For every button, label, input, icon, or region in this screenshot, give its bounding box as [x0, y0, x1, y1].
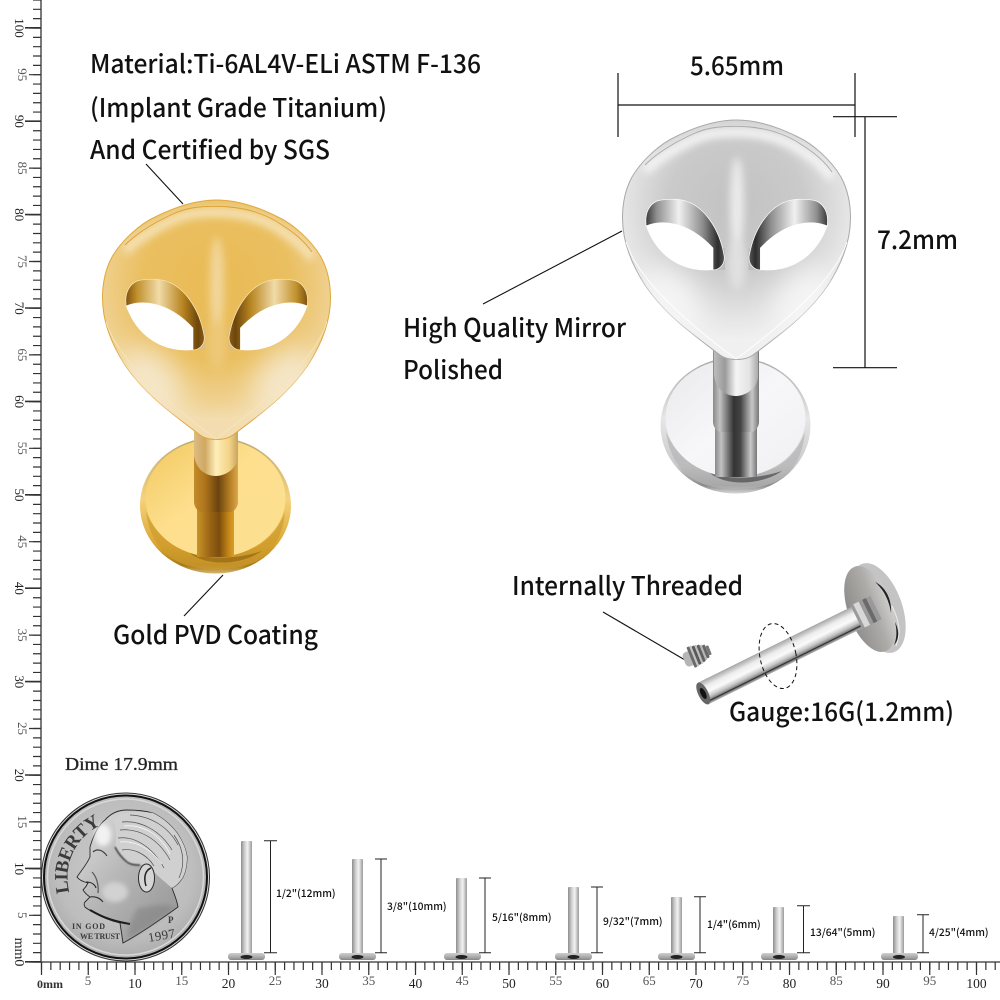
- ruler: vertical axis: mm0: [11, 938, 26, 966]
- ruler: horizontal axis: 80: [783, 976, 796, 991]
- icon: dime coin: [42, 792, 210, 962]
- ruler: vertical axis: 40: [12, 582, 27, 595]
- post disc: [834, 556, 917, 660]
- label: internally threaded: Internally Threaded: [512, 566, 743, 603]
- dime legend text: [55, 814, 176, 945]
- height dimension: [833, 117, 897, 368]
- label: dime: Dime 17.9mm: [65, 754, 178, 774]
- threaded labret post: [693, 556, 917, 707]
- ruler: horizontal axis: 90: [876, 976, 890, 991]
- label: width 5.65mm: 5.65mm: [690, 46, 784, 83]
- leader line: material: [146, 164, 183, 204]
- ruler: vertical axis: 85: [15, 162, 30, 175]
- gold head: [102, 200, 331, 440]
- dime legend text: IN GOD: [72, 922, 105, 931]
- pin 5mm with dimension: [761, 906, 875, 960]
- label: gauge: Gauge:16G(1.2mm): [729, 692, 954, 729]
- material heading: [90, 44, 481, 167]
- gauge dashed ring: [754, 620, 802, 692]
- gold eyes: [126, 279, 308, 350]
- ruler: horizontal axis: 75: [736, 973, 749, 988]
- ruler: vertical axis: 65: [15, 348, 30, 361]
- silver eyes: [646, 199, 828, 270]
- material heading: (Implant Grade Titanium): [90, 88, 387, 125]
- material heading: And Certified by SGS: [90, 130, 330, 167]
- ruler: vertical axis: 55: [15, 442, 30, 455]
- pin 8mm with dimension: [444, 878, 552, 960]
- ruler: horizontal axis: 5: [85, 973, 91, 988]
- leader line: gold coating: [184, 575, 223, 616]
- ruler: vertical axis: 15: [15, 815, 30, 828]
- pin 10mm with dimension: [339, 859, 447, 960]
- ruler: horizontal axis: [37, 962, 1000, 991]
- leader line: mirror polish: [483, 231, 622, 304]
- ruler: horizontal axis: 85: [830, 973, 843, 988]
- ruler: vertical axis: 75: [15, 255, 30, 268]
- silver head: [622, 120, 851, 360]
- ruler: vertical axis: [11, 0, 41, 966]
- dime legend text: 1997: [147, 925, 176, 945]
- label: high quality mirror polished: [403, 308, 627, 387]
- ruler: horizontal axis: 100: [966, 976, 987, 991]
- ruler: vertical axis: 45: [15, 535, 30, 548]
- ruler: horizontal axis: 0mm: [37, 977, 63, 991]
- dime legend text: P: [168, 915, 174, 925]
- material heading: Material:Ti-6AL4V-ELi ASTM F-136: [90, 44, 481, 81]
- ruler: vertical axis: 90: [12, 115, 27, 128]
- ruler: vertical axis: 95: [15, 68, 30, 81]
- pin 6mm with dimension: 1/4"(6mm): [707, 916, 761, 931]
- ruler: horizontal axis: 45: [456, 973, 469, 988]
- ruler: vertical axis: 30: [12, 675, 27, 688]
- ruler: vertical axis: 50: [12, 488, 27, 502]
- leader line: thread: [603, 612, 685, 660]
- ruler: vertical axis: 20: [12, 769, 27, 782]
- ruler: horizontal axis: 55: [549, 973, 562, 988]
- pin 8mm with dimension: 5/16"(8mm): [492, 909, 552, 924]
- ruler: horizontal axis: 10: [128, 976, 142, 991]
- ruler: vertical axis: 5: [15, 912, 30, 919]
- ruler: vertical axis: 10: [12, 862, 27, 875]
- ruler: horizontal axis: 25: [269, 973, 282, 988]
- dime portrait: [77, 810, 187, 943]
- gold alien labret: [102, 200, 331, 574]
- ruler: horizontal axis: 30: [315, 976, 329, 991]
- ruler: horizontal axis: 20: [222, 976, 236, 991]
- label: height 7.2mm: 7.2mm: [877, 220, 958, 257]
- dime legend text: WE TRUST: [80, 932, 121, 941]
- dime legend text: LIBERTY: [55, 814, 98, 894]
- ruler: vertical axis: 80: [12, 208, 27, 221]
- silver alien labret: [622, 120, 851, 494]
- ruler: horizontal axis: 35: [362, 973, 375, 988]
- pin 7mm with dimension: 9/32"(7mm): [603, 913, 663, 928]
- ruler: vertical axis: 100: [12, 18, 27, 38]
- ruler: horizontal axis: 40: [409, 976, 422, 991]
- pin 5mm with dimension: 13/64"(5mm): [810, 924, 875, 939]
- ruler: vertical axis: 25: [15, 722, 30, 735]
- post rod: [693, 596, 882, 707]
- pin 7mm with dimension: [555, 887, 663, 960]
- gold base disc: [140, 438, 291, 574]
- label: high quality mirror polished: High Quality Mirror: [403, 308, 627, 345]
- silver base disc: [660, 358, 810, 494]
- label: gold PVD coating: Gold PVD Coating: [113, 615, 318, 652]
- gold shaft: [194, 425, 238, 557]
- pin 4mm with dimension: 4/25"(4mm): [929, 924, 989, 939]
- ruler: horizontal axis: 70: [689, 976, 703, 991]
- ruler: horizontal axis: 60: [596, 976, 610, 991]
- ruler: horizontal axis: 95: [923, 973, 936, 988]
- pin 12mm with dimension: [228, 841, 336, 960]
- pin 12mm with dimension: 1/2"(12mm): [276, 885, 336, 900]
- icon: threaded screw: [680, 640, 714, 670]
- ruler: horizontal axis: 65: [643, 973, 656, 988]
- ruler: horizontal axis: 50: [502, 976, 516, 991]
- ruler: vertical axis: 35: [15, 629, 30, 642]
- pin 10mm with dimension: 3/8"(10mm): [387, 898, 447, 913]
- pin 4mm with dimension: [881, 915, 989, 960]
- label: high quality mirror polished: Polished: [403, 350, 503, 387]
- ruler: vertical axis: 60: [12, 395, 27, 408]
- silver shaft: [713, 345, 759, 477]
- ruler: vertical axis: 70: [12, 302, 27, 315]
- width dimension: [618, 73, 855, 137]
- pin 6mm with dimension: [658, 897, 761, 960]
- ruler: horizontal axis: 15: [175, 973, 188, 988]
